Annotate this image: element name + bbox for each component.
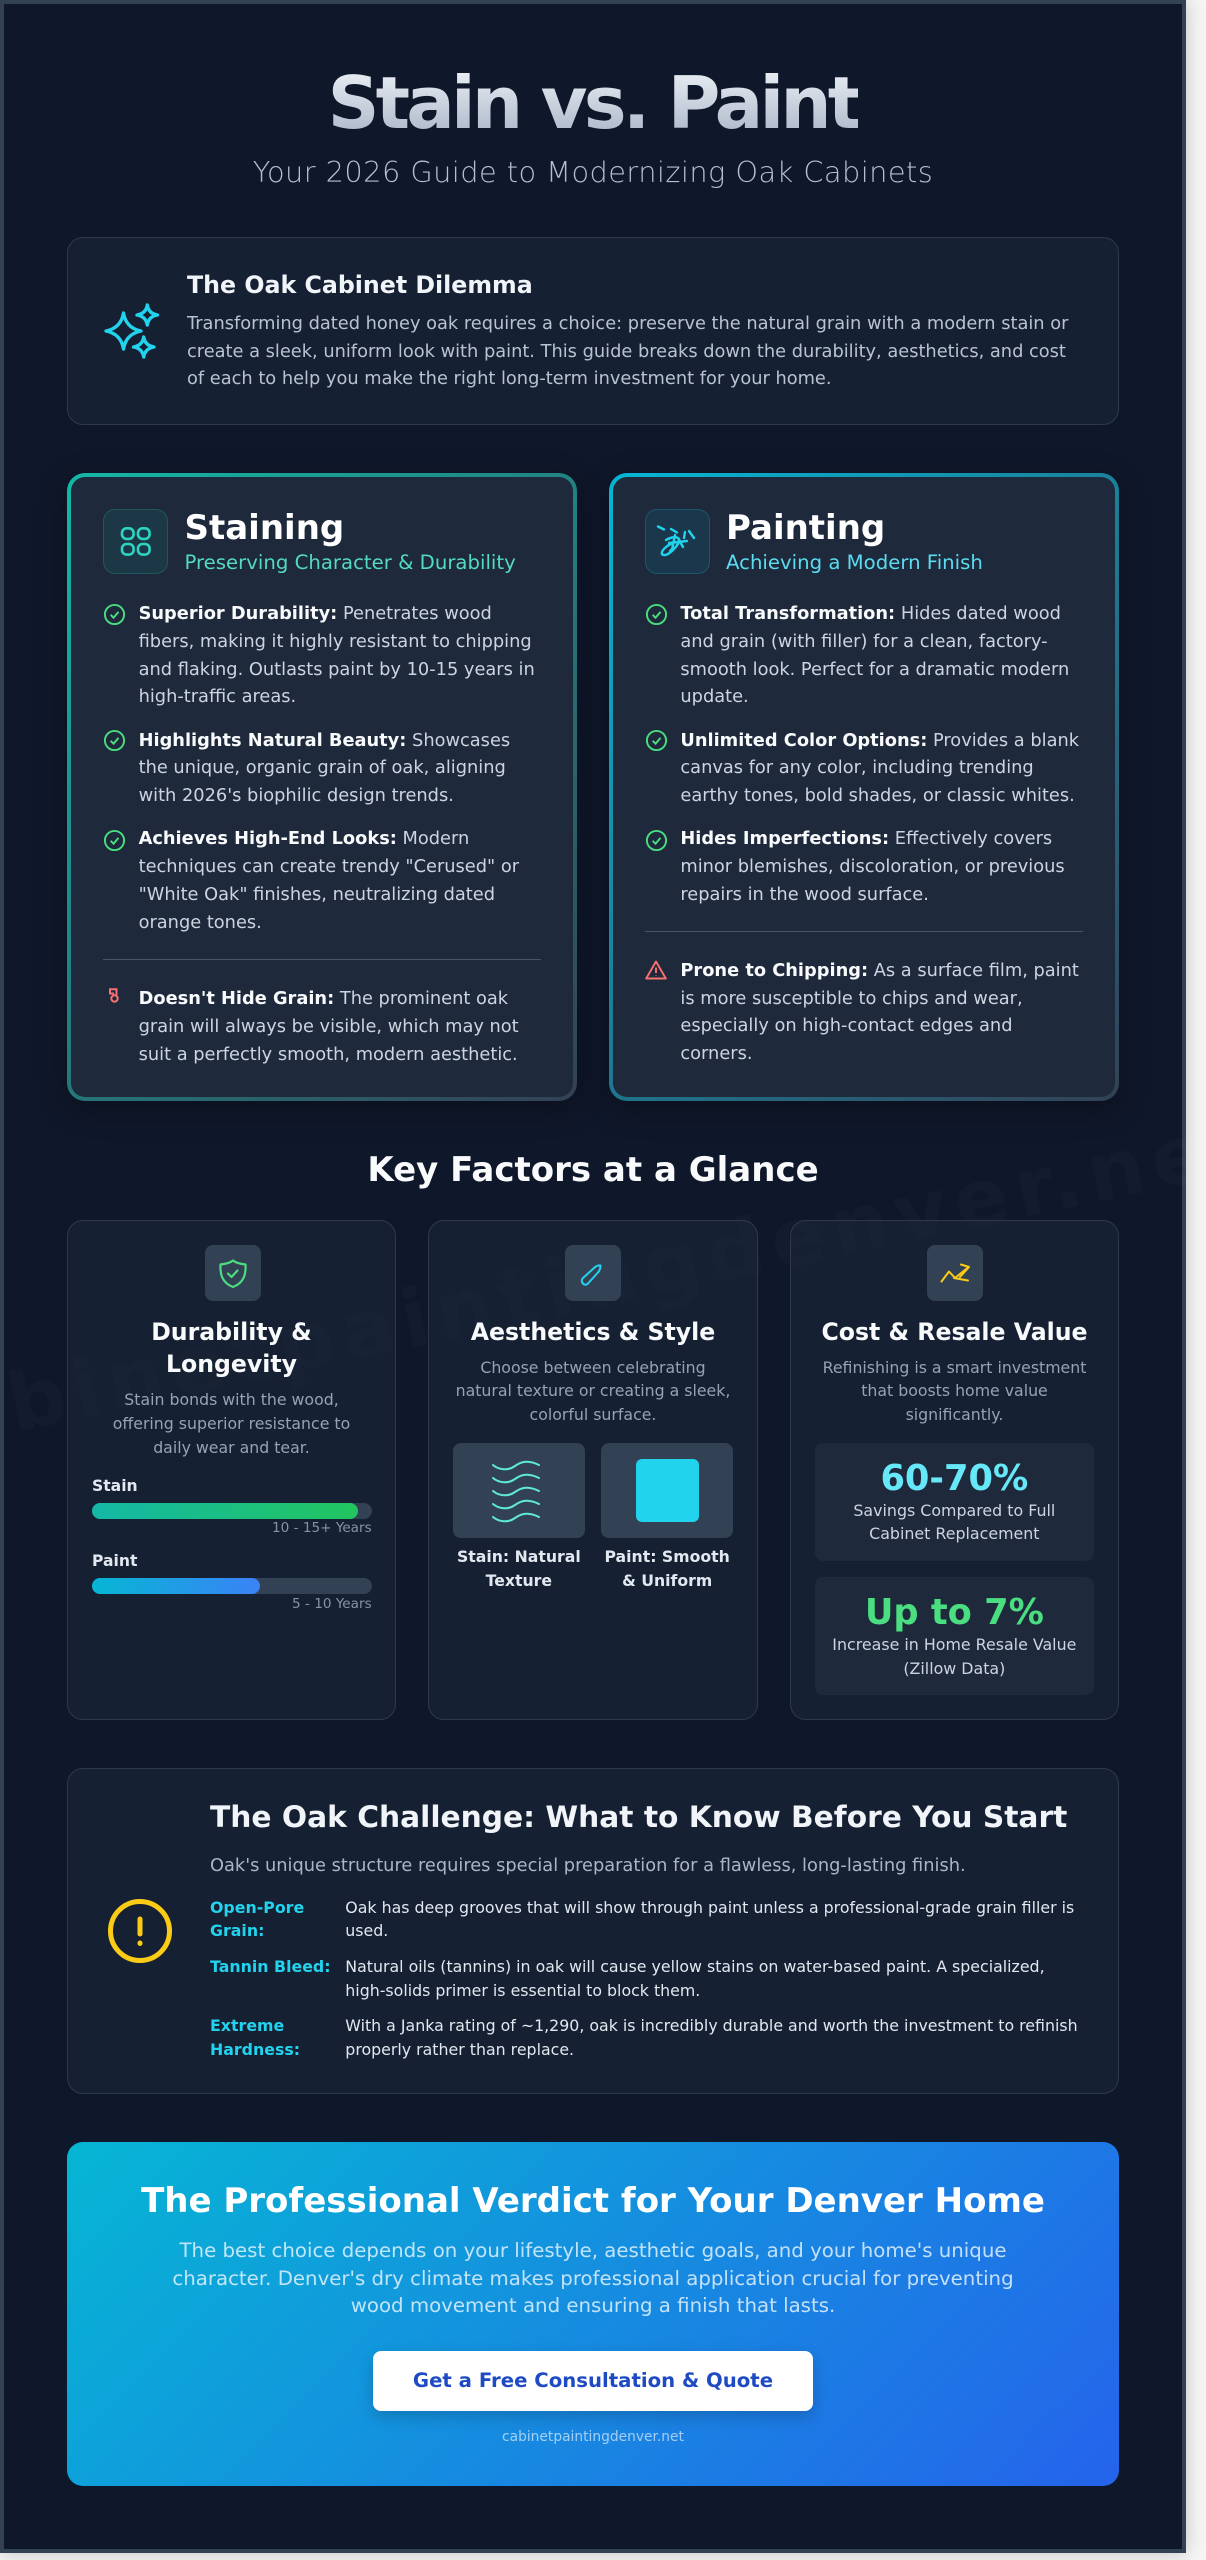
icon: check 3: [104, 830, 125, 851]
panel: staining: [67, 473, 577, 1101]
bar value: paint: 5 - 10 Years: [292, 1596, 372, 1612]
stat number: savings: 60-70%: [880, 1458, 1028, 1499]
pro: high-end looks: techniques can create trendy "Cerused" or: [139, 856, 519, 877]
icon: check 1: [646, 604, 667, 625]
stat label: savings: Savings Compared to Full: [853, 1501, 1055, 1520]
con: does not hide grain: grain will always be visible, which may not: [139, 1016, 519, 1037]
con: prone to chipping: [680, 960, 1079, 1064]
label: stain texture: [457, 1547, 581, 1590]
pro: unlimited color options: earthy tones, bold shades, or classic whites.: [680, 785, 1075, 806]
panel: cost and resale value: [790, 1220, 1119, 1720]
term: tannin bleed: Tannin Bleed:: [210, 1957, 331, 1976]
label: paint finish: Paint: Smooth: [604, 1547, 730, 1566]
con: prone to chipping: especially on high-contact edges and: [680, 1015, 1012, 1036]
pro: hides imperfections: repairs in the wood surface.: [680, 884, 929, 905]
description: tannin bleed: Natural oils (tannins) in oak will cause yellow stains on water-based paint. A specialized,: [345, 1957, 1045, 1976]
text: dilemma intro: create a sleek, uniform look with paint. This guide breaks down the durability, aesthetics, and cost: [187, 341, 1066, 362]
label: paint finish: & Uniform: [622, 1571, 712, 1590]
icon: brush: [565, 1245, 621, 1301]
panel: aesthetics and style: [428, 1220, 758, 1720]
description: tannin bleed: [345, 1957, 1045, 2000]
text: dilemma intro: Transforming dated honey oak requires a choice: preserve the natural grain with a modern stain or: [187, 313, 1068, 334]
bar value: stain: 10 - 15+ Years: [272, 1520, 372, 1536]
stat label: savings: [853, 1501, 1055, 1543]
heading: aesthetics: Aesthetics & Style: [471, 1318, 715, 1346]
term: extreme hardness: Extreme: [210, 2016, 284, 2035]
pro: total transformation: smooth look. Perfect for a dramatic modern: [680, 659, 1069, 680]
heading: dilemma: The Oak Cabinet Dilemma: [187, 271, 533, 299]
bar: paint: [92, 1578, 372, 1594]
subheading: staining: Preserving Character & Durability: [184, 550, 516, 574]
description: extreme hardness: [345, 2016, 1078, 2059]
pro: highlights natural beauty: with 2026's biophilic design trends.: [139, 785, 454, 806]
text: aesthetics: colorful surface.: [530, 1405, 656, 1424]
con: prone to chipping: is more susceptible to chips and wear,: [680, 988, 1023, 1009]
term: open-pore grain: [210, 1898, 304, 1940]
stat number: resale: Up to 7%: [865, 1592, 1044, 1633]
heading: durability: Longevity: [166, 1350, 297, 1378]
pro: total transformation: Total Transformation: Hides dated wood: [680, 603, 1061, 624]
text: durability: offering superior resistance to: [113, 1414, 350, 1433]
heading: cost: Cost & Resale Value: [821, 1318, 1088, 1346]
icon: check 1: [104, 604, 125, 625]
icon: painting brush: [644, 509, 710, 574]
icon: staining grid: [103, 509, 168, 574]
subtitle: Your 2026 Guide to Modernizing Oak Cabinets: [253, 155, 933, 189]
heading: oak challenge: The Oak Challenge: What to Know Before You Start: [210, 1800, 1067, 1835]
con: prone to chipping: corners.: [680, 1043, 752, 1064]
pro: superior durability: [139, 603, 535, 707]
pro: high-end looks: orange tones.: [139, 912, 262, 933]
stat: savings: [815, 1443, 1094, 1561]
pro: unlimited color options: Unlimited Color Options: Provides a blank: [680, 730, 1079, 751]
heading: staining: Staining: [184, 508, 344, 548]
description: open-pore grain: Oak has deep grooves that will show through paint unless a professional-grade grain filler is: [345, 1898, 1074, 1917]
text: durability: [113, 1390, 350, 1457]
text: aesthetics: natural texture or creating a sleek,: [456, 1381, 730, 1400]
swatch: natural texture: [453, 1443, 585, 1538]
pro: unlimited color options: canvas for any color, including trending: [680, 757, 1034, 778]
icon: check 2: [646, 730, 667, 751]
heading: verdict: The Professional Verdict for Your Denver Home: [141, 2180, 1045, 2220]
swatch: smooth uniform: [601, 1443, 733, 1538]
icon: shield: [205, 1245, 261, 1301]
description: extreme hardness: With a Janka rating of ~1,290, oak is incredibly durable and worth the investment to refinish: [345, 2016, 1078, 2035]
term: open-pore grain: Grain:: [210, 1921, 264, 1940]
panel: professional verdict call to action: [67, 2142, 1119, 2486]
pro: high-end looks: Achieves High-End Looks: Modern: [139, 828, 469, 849]
text: aesthetics: [456, 1358, 730, 1424]
pro: hides imperfections: [680, 828, 1065, 905]
text: durability: daily wear and tear.: [153, 1438, 310, 1457]
text: cost: [823, 1358, 1086, 1424]
heading: durability: [151, 1318, 312, 1378]
pro: highlights natural beauty: Highlights Natural Beauty: Showcases: [139, 730, 510, 751]
label: stain texture: Texture: [486, 1571, 552, 1590]
icon: sparkles: [104, 303, 160, 359]
pro: total transformation: update.: [680, 686, 749, 707]
text: dilemma intro: [186, 313, 1068, 389]
icon: check 3: [646, 830, 667, 851]
term: extreme hardness: Hardness:: [210, 2040, 300, 2059]
bar label: stain: Stain: [92, 1477, 138, 1495]
description: open-pore grain: used.: [345, 1921, 388, 1940]
text: verdict: wood movement and ensuring a finish that lasts.: [351, 2294, 835, 2317]
pro: superior durability: fibers, making it highly resistant to chipping: [139, 631, 532, 652]
panel: the oak challenge: [67, 1768, 1119, 2094]
pro: total transformation: [680, 603, 1069, 707]
description: extreme hardness: properly rather than replace.: [345, 2040, 574, 2059]
pro: hides imperfections: minor blemishes, discoloration, or previous: [680, 856, 1065, 877]
icon: con pin: [109, 988, 119, 1003]
description: open-pore grain: [345, 1898, 1074, 1940]
heading: painting: Painting: [726, 508, 885, 548]
text: cost: significantly.: [906, 1405, 1003, 1424]
pro: total transformation: and grain (with filler) for a clean, factory-: [680, 631, 1048, 652]
text: verdict: The best choice depends on your lifestyle, aesthetic goals, and your home's unique: [179, 2239, 1006, 2262]
stat label: resale: (Zillow Data): [903, 1659, 1005, 1678]
stat label: resale: [832, 1635, 1076, 1678]
bar label: paint: Paint: [92, 1552, 137, 1570]
text: cost: that boosts home value: [861, 1381, 1048, 1400]
con: prone to chipping: Prone to Chipping: As a surface film, paint: [680, 960, 1079, 981]
pro: highlights natural beauty: [139, 730, 510, 806]
text: durability: Stain bonds with the wood,: [124, 1390, 339, 1409]
pro: highlights natural beauty: the unique, organic grain of oak, aligning: [139, 757, 506, 778]
pro: superior durability: and flaking. Outlasts paint by 10-15 years in: [139, 659, 535, 680]
description: tannin bleed: high-solids primer is essential to block them.: [345, 1981, 700, 2000]
title: Stain vs. Paint: [328, 61, 858, 145]
text: verdict: character. Denver's dry climate makes professional application crucial for preventing: [172, 2267, 1014, 2290]
panel: durability and longevity: [67, 1220, 396, 1720]
con: does not hide grain: [139, 988, 519, 1065]
text: verdict: [172, 2239, 1014, 2317]
stat label: resale: Increase in Home Resale Value: [832, 1635, 1076, 1654]
label: stain texture: Stain: Natural: [457, 1547, 581, 1566]
icon: warning triangle: [645, 960, 667, 980]
con: does not hide grain: suit a perfectly smooth, modern aesthetic.: [139, 1044, 518, 1065]
text: challenge intro: Oak's unique structure requires special preparation for a flawless, long-lasting finish.: [210, 1854, 966, 1876]
panel: the oak cabinet dilemma: [67, 237, 1119, 425]
subheading: painting: Achieving a Modern Finish: [726, 550, 983, 574]
icon: check 2: [104, 730, 125, 751]
heading: durability: Durability &: [151, 1318, 312, 1346]
pro: superior durability: Superior Durability: Penetrates wood: [139, 603, 492, 624]
pro: superior durability: high-traffic areas.: [139, 686, 296, 707]
stat label: savings: Cabinet Replacement: [869, 1524, 1040, 1543]
pro: high-end looks: [138, 828, 520, 933]
term: open-pore grain: Open-Pore: [210, 1898, 304, 1917]
footer url: cabinetpaintingdenver.net: [502, 2428, 684, 2444]
pro: unlimited color options: [680, 730, 1079, 806]
label: paint finish: [604, 1547, 730, 1590]
bar: stain: [92, 1503, 372, 1519]
icon: alert circle: [108, 1899, 172, 1963]
text: aesthetics: Choose between celebrating: [480, 1358, 706, 1377]
pro: high-end looks: "White Oak" finishes, neutralizing dated: [139, 884, 495, 905]
button: get a free consultation: [373, 2351, 813, 2411]
panel: painting: [609, 473, 1119, 1101]
con: does not hide grain: Doesn't Hide Grain: The prominent oak: [139, 988, 508, 1009]
term: extreme hardness: [210, 2016, 300, 2059]
button: get a free consultation: Get a Free Consultation & Quote: [413, 2369, 773, 2392]
text: dilemma intro: of each to help you make the right long-term investment for your home.: [187, 368, 832, 389]
pro: hides imperfections: Hides Imperfections: Effectively covers: [680, 828, 1052, 849]
icon: trend line: [926, 1245, 982, 1301]
text: cost: Refinishing is a smart investment: [823, 1358, 1086, 1377]
stat: resale: [815, 1577, 1094, 1695]
heading: key factors: Key Factors at a Glance: [367, 1150, 819, 1190]
